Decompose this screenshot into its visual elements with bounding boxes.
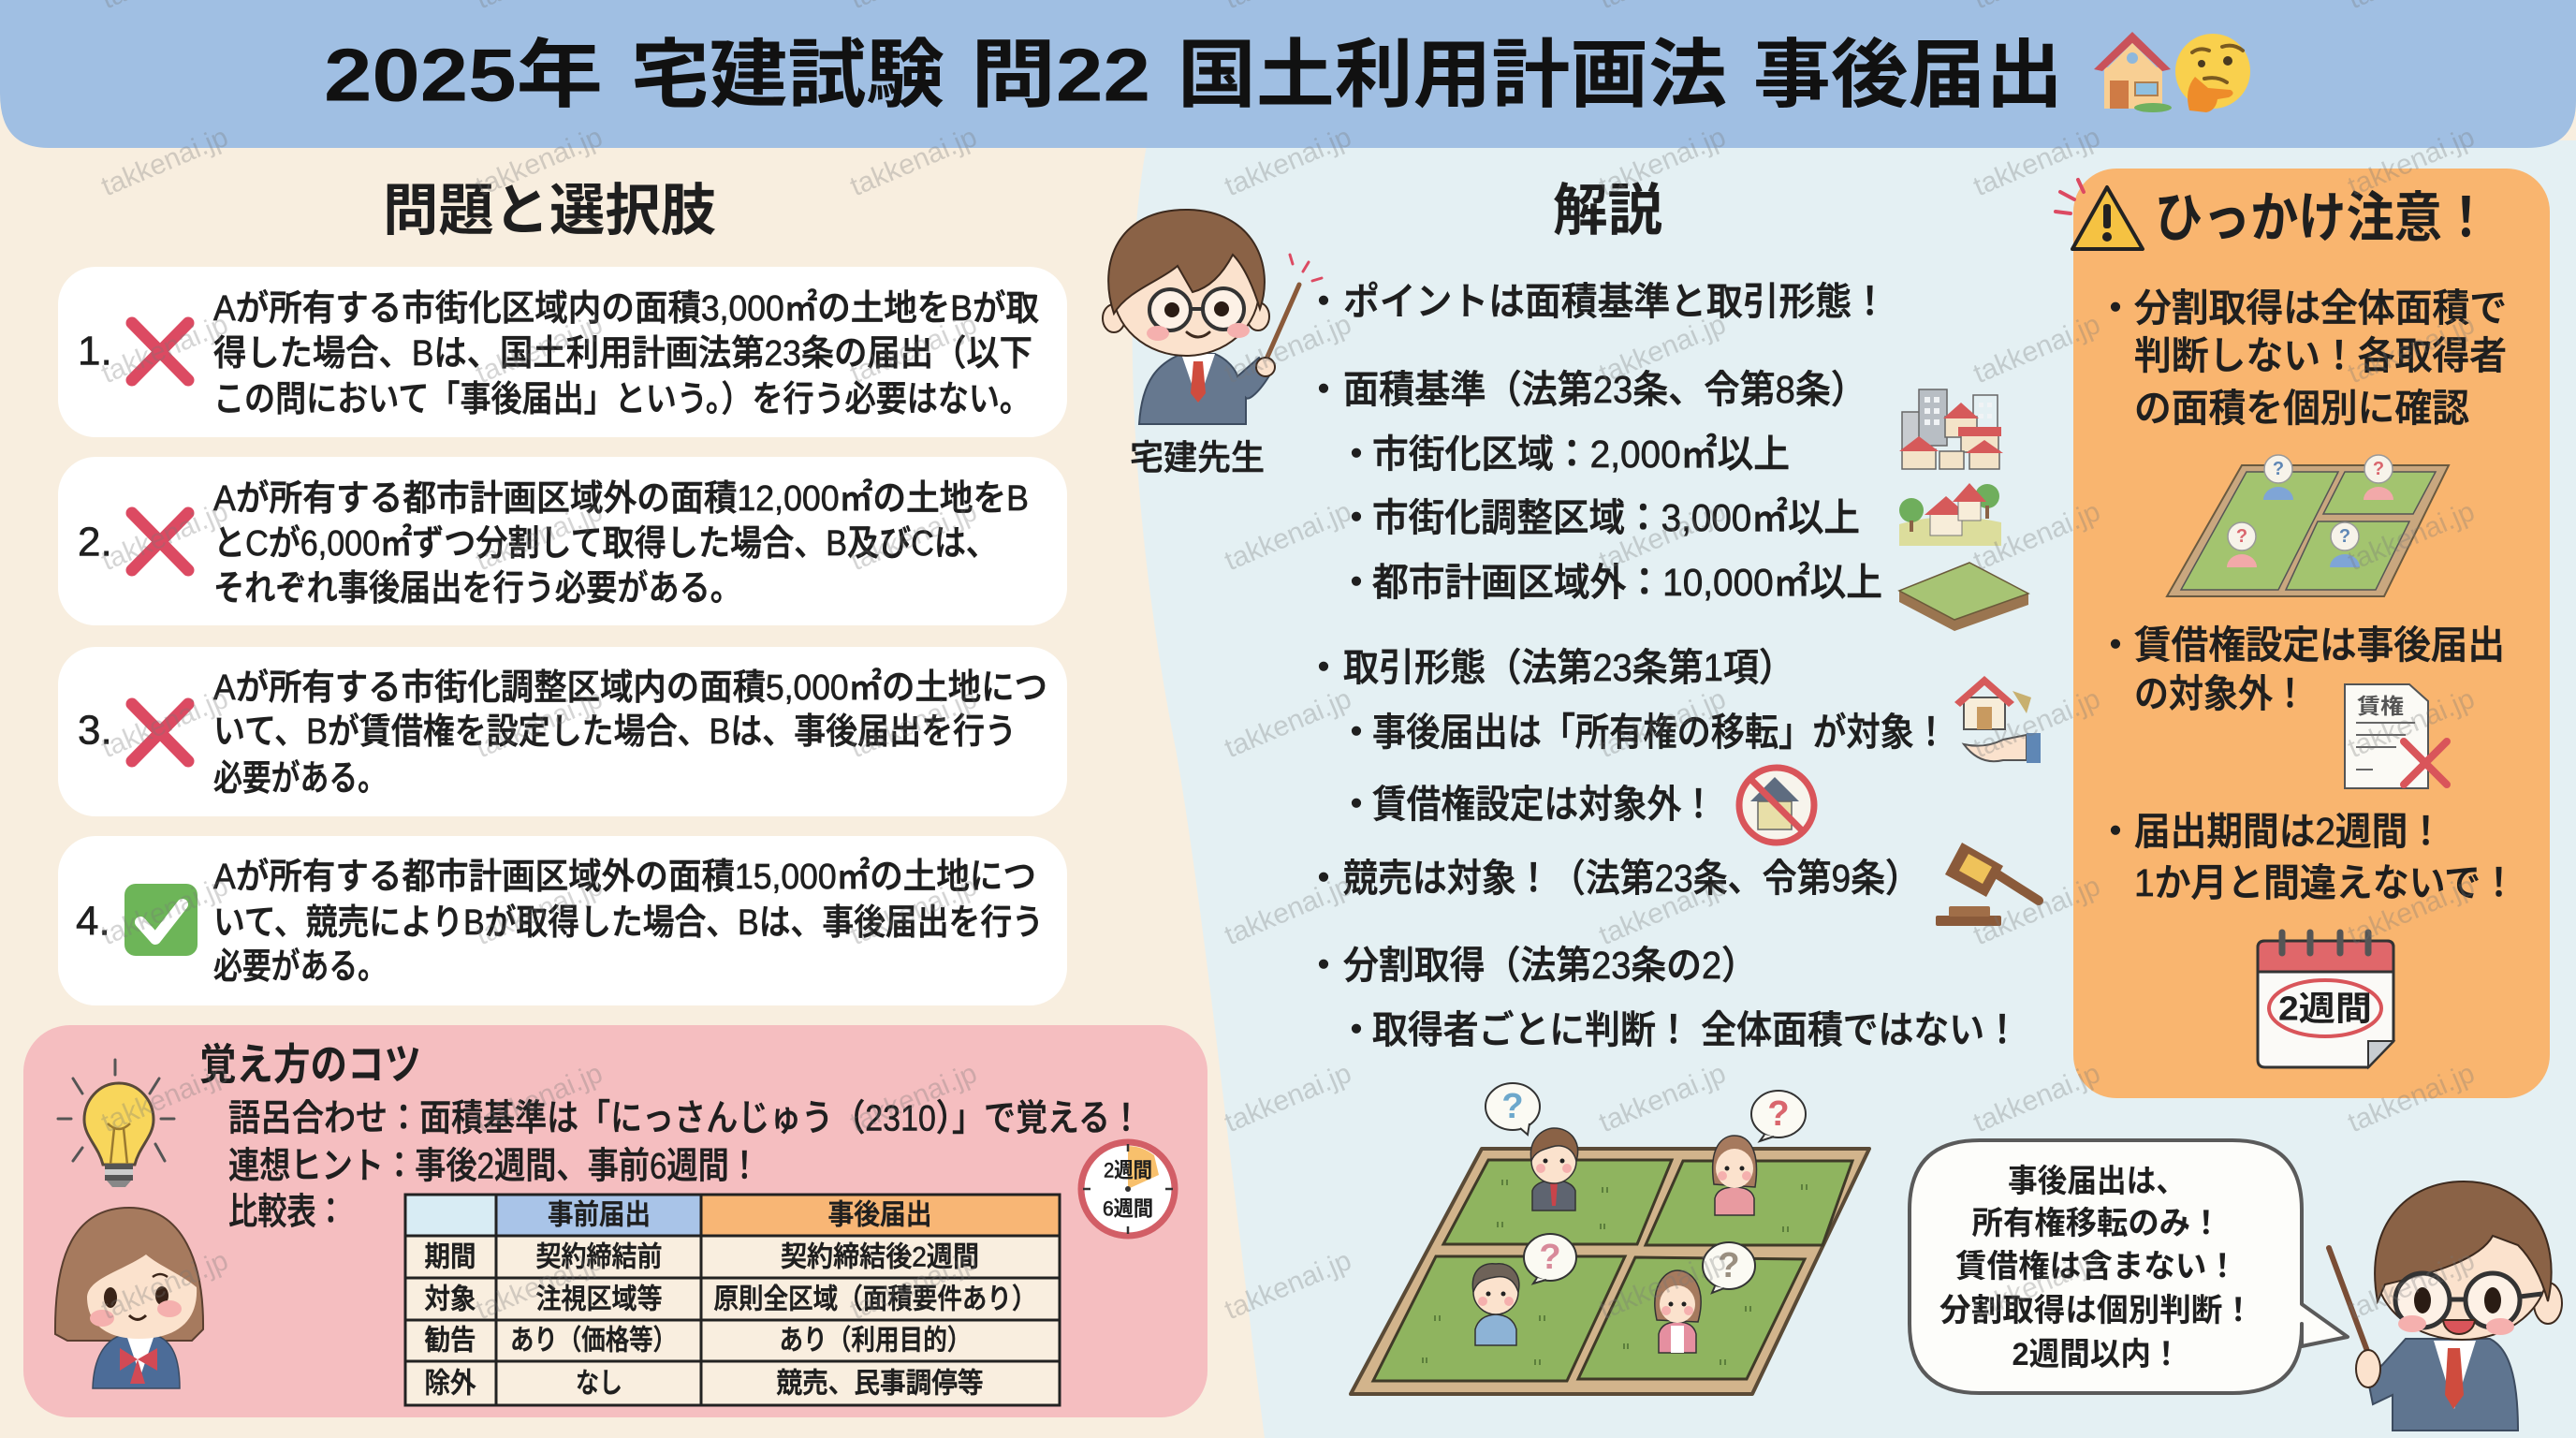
warning point 1: 分割取得は全体面積で [2134, 286, 2507, 330]
illustration: divided land mini: ? [2339, 526, 2350, 547]
explanation: transaction type: 賃借権設定は対象外！ [1372, 783, 1716, 826]
option card 1: この問において「事後届出」という。）を行う必要はない。 [213, 380, 1031, 419]
warning point 3: 届出期間は2週間！ [2134, 810, 2444, 853]
option card 2: 2. [78, 519, 112, 565]
watermarks: takkenai.jp [1969, 871, 2104, 951]
explanation: key point: ポイントは面積基準と取引形態！ [1343, 280, 1888, 323]
watermarks: takkenai.jp [2344, 683, 2479, 764]
option card 1 [58, 267, 1067, 437]
explanation: transaction type: 事後届出は「所有権の移転」が対象！ [1372, 711, 1948, 754]
explanation: divided acquisition [1305, 944, 2020, 1051]
comparison table: 期間 [425, 1241, 476, 1273]
icon: house [2094, 32, 2172, 112]
icon: check mark [124, 884, 198, 956]
explanation: key point: ・ [1305, 280, 1342, 323]
buyer 4 [1655, 1270, 1701, 1353]
watermarks: takkenai.jp [2344, 1058, 2479, 1138]
watermarks: takkenai.jp [472, 871, 607, 951]
mnemonic lines: 語呂合わせ：面積基準は「にっさんじゅう（2310）」で覚える！ [228, 1099, 1142, 1138]
warning point 2: ・ [2097, 624, 2134, 667]
watermarks: takkenai.jp [2344, 871, 2479, 951]
icon: clock 2 weeks / 6 weeks [1081, 1142, 1175, 1236]
comparison table: 競売、民事調停等 [777, 1369, 983, 1399]
illustration: divided land mini: ? [2373, 459, 2384, 479]
option card 2 [58, 457, 1067, 625]
comparison table: 対象 [425, 1284, 476, 1314]
question bubbles: ? [1501, 1087, 1524, 1126]
title: 事後届出 [1753, 34, 2063, 116]
icon: house on hand [1954, 676, 2041, 763]
explanation: transaction type: ・ [1337, 783, 1376, 826]
watermarks: takkenai.jp [97, 309, 232, 389]
watermarks: takkenai.jp [1221, 871, 1355, 951]
speech bubble: 分割取得は個別判断！ [1939, 1293, 2254, 1328]
watermarks: takkenai.jp [1969, 122, 2104, 202]
warning point 2 [2097, 624, 2505, 715]
explanation: auction: 競売は対象！（法第23条、令第9条） [1343, 857, 1920, 900]
watermarks: takkenai.jp [2344, 1245, 2479, 1326]
watermarks: takkenai.jp [1221, 122, 1355, 202]
heading: trap warning: ひっかけ注意！ [2155, 187, 2490, 249]
watermarks: takkenai.jp [1221, 1245, 1355, 1326]
mnemonic lines: 比較表： [228, 1193, 345, 1232]
explanation: area thresholds: ・ [1305, 368, 1342, 411]
comparison table [405, 1195, 1060, 1405]
icon: no lease house [1739, 768, 1814, 843]
explanation: transaction type: ・ [1305, 646, 1342, 689]
buyer 2 [1713, 1136, 1756, 1215]
icon: city buildings [1899, 389, 2003, 469]
icon: clock 2 weeks / 6 weeks: 6週間 [1103, 1196, 1153, 1221]
section heading: question and options: 問題と選択肢 [383, 180, 716, 242]
warning point 3 [2097, 810, 2517, 904]
watermarks: takkenai.jp [1969, 1058, 2104, 1138]
warning point 1: ・ [2097, 286, 2134, 330]
comparison table: あり（価格等） [510, 1326, 677, 1356]
option card 4: いて、競売によりBが取得した場合、Bは、事後届出を行う [213, 903, 1044, 943]
icon: cross mark [132, 513, 188, 570]
option card 3: 必要がある。 [213, 759, 387, 799]
heading: memory tips: 覚え方のコツ [199, 1040, 421, 1089]
title: 宅建試験 [631, 34, 944, 116]
option card 1: Aが所有する市街化区域内の面積3,000㎡の土地をBが取 [213, 289, 1039, 329]
explanation: transaction type: ・ [1337, 711, 1376, 754]
watermarks: takkenai.jp [1595, 871, 1730, 951]
watermarks: takkenai.jp [1595, 309, 1730, 389]
warning point 3: ・ [2097, 810, 2134, 853]
watermarks: takkenai.jp [846, 496, 981, 577]
option card 3 [58, 647, 1067, 816]
watermarks: takkenai.jp [1969, 496, 2104, 577]
explanation: divided acquisition: ・ [1337, 1008, 1376, 1051]
explanation: transaction type: 取引形態（法第23条第1項） [1343, 646, 1794, 689]
option card 4: 必要がある。 [213, 947, 387, 987]
section heading: explanation: 解説 [1553, 180, 1662, 242]
explanation: auction: ・ [1305, 857, 1342, 900]
watermarks: takkenai.jp [472, 1058, 607, 1138]
watermarks: takkenai.jp [1595, 496, 1730, 577]
explanation: transaction type [1305, 646, 1948, 826]
option card 2: Aが所有する都市計画区域外の面積12,000㎡の土地をB [213, 479, 1029, 519]
icon: green land tile [1899, 563, 2028, 631]
mnemonic lines [228, 1099, 1142, 1232]
explanation: area thresholds: 市街化区域：2,000㎡以上 [1372, 433, 1790, 476]
option card 1: 1. [78, 328, 112, 374]
option card 3: いて、Bが賃借権を設定した場合、Bは、事後届出を行う [213, 712, 1017, 752]
panel: trap warning [2056, 169, 2550, 1098]
option card 2: とCが6,000㎡ずつ分割して取得した場合、B及びCは、 [213, 524, 998, 564]
explanation: divided acquisition: 取得者ごとに判断！ 全体面積ではない！ [1372, 1008, 2020, 1051]
option card 1: 得した場合、Bは、国土利用計画法第23条の届出（以下 [213, 334, 1032, 374]
watermarks: takkenai.jp [472, 309, 607, 389]
watermarks: takkenai.jp [1221, 1058, 1355, 1138]
title: 問22 [971, 34, 1150, 116]
option card 2: それぞれ事後届出を行う必要がある。 [213, 569, 741, 609]
watermarks: takkenai.jp [1595, 1245, 1730, 1326]
speech bubble: 所有権移転のみ！ [1971, 1206, 2222, 1241]
watermarks: takkenai.jp [846, 122, 981, 202]
character: teacher top [1103, 210, 1322, 424]
panel: memory tips [23, 1025, 1208, 1417]
comparison table: 注視区域等 [535, 1284, 663, 1314]
option card 3: 3. [78, 708, 112, 753]
speech bubble: 2週間以内！ [2012, 1337, 2181, 1372]
icon: warning triangle [2056, 180, 2143, 249]
header band [0, 0, 2576, 148]
option card 4 [58, 836, 1067, 1005]
pointer [1265, 285, 1299, 363]
icon: cross mark [132, 704, 188, 761]
comparison table: 事前届出 [548, 1200, 651, 1230]
icon: lease document with cross: 賃権 [2357, 694, 2404, 718]
buyer 1 [1530, 1128, 1578, 1211]
watermarks: takkenai.jp [1969, 683, 2104, 764]
illustration: divided land mini [2167, 455, 2449, 596]
watermarks: takkenai.jp [846, 871, 981, 951]
icon: lease document with cross [2345, 684, 2447, 788]
buyer 3 [1472, 1264, 1519, 1345]
comparison table: 契約締結前 [535, 1241, 663, 1273]
comparison table: 事後届出 [827, 1200, 932, 1230]
warning point 1: の面積を個別に確認 [2134, 387, 2469, 430]
watermarks: takkenai.jp [1221, 683, 1355, 764]
watermarks: takkenai.jp [846, 1245, 981, 1326]
icon: calendar 2 weeks: 2週間 [2278, 989, 2372, 1028]
character: teacher bottom [2329, 1181, 2562, 1431]
warning point 1: 判断しない！各取得者 [2134, 334, 2507, 377]
speech bubble: 賃借権は含まない！ [1955, 1249, 2238, 1284]
illustration: divided land with four buyers [1351, 1083, 1869, 1394]
watermarks: takkenai.jp [1221, 309, 1355, 389]
watermarks: takkenai.jp [846, 309, 981, 389]
watermarks: takkenai.jp [846, 683, 981, 764]
watermarks: takkenai.jp [2344, 309, 2479, 389]
illustration: divided land mini: ? [2273, 459, 2284, 479]
character: student girl [55, 1208, 203, 1388]
watermarks: takkenai.jp [472, 683, 607, 764]
icon: cross mark [132, 323, 188, 380]
watermarks: takkenai.jp [97, 1058, 232, 1138]
watermarks: takkenai.jp [1595, 683, 1730, 764]
explanation: area thresholds: ・ [1337, 496, 1376, 539]
watermarks: takkenai.jp [1221, 496, 1355, 577]
explanation: area thresholds: 都市計画区域外：10,000㎡以上 [1372, 561, 1882, 604]
title: 国土利用計画法 [1178, 34, 1727, 116]
watermarks: takkenai.jp [472, 1245, 607, 1326]
mnemonic lines: 連想ヒント：事後2週間、事前6週間！ [228, 1146, 760, 1187]
question bubbles [1486, 1083, 1806, 1293]
warning point 3: 1か月と間違えないで！ [2134, 861, 2517, 904]
explanation: divided acquisition: 分割取得（法第23条の2） [1343, 944, 1757, 987]
option card 3: Aが所有する市街化調整区域内の面積5,000㎡の土地につ [213, 668, 1047, 708]
icon: gavel [1936, 843, 2039, 926]
icon: thinking face [2175, 34, 2250, 112]
question bubbles: ? [1767, 1094, 1790, 1134]
icon: light bulb [58, 1060, 174, 1187]
title: 2025年 [324, 34, 603, 116]
watermarks: takkenai.jp [97, 496, 232, 577]
watermarks: takkenai.jp [97, 871, 232, 951]
warning point 2: の対象外！ [2134, 672, 2307, 715]
comparison table: あり（利用目的） [779, 1326, 972, 1356]
question bubbles: ? [1718, 1246, 1740, 1285]
watermarks: takkenai.jp [1595, 1058, 1730, 1138]
watermarks: takkenai.jp [97, 1245, 232, 1326]
speech bubble [1910, 1140, 2348, 1393]
speech bubble: 事後届出は、 [2008, 1164, 2186, 1199]
warning point 2: 賃借権設定は事後届出 [2134, 624, 2505, 667]
explanation: divided acquisition: ・ [1305, 944, 1342, 987]
comparison table: 除外 [425, 1369, 476, 1399]
icon: clock 2 weeks / 6 weeks: 2週間 [1104, 1159, 1152, 1181]
watermarks: takkenai.jp [472, 122, 607, 202]
icon: suburban village [1899, 483, 2001, 546]
watermarks: takkenai.jp [2344, 122, 2479, 202]
icon: calendar 2 weeks [2258, 932, 2393, 1067]
explanation: area thresholds: 市街化調整区域：3,000㎡以上 [1372, 496, 1860, 539]
watermarks: takkenai.jp [1969, 309, 2104, 389]
comparison table: 原則全区域（面積要件あり） [713, 1284, 1037, 1314]
watermarks: takkenai.jp [1969, 1245, 2104, 1326]
watermarks: takkenai.jp [2344, 496, 2479, 577]
watermarks: takkenai.jp [97, 122, 232, 202]
comparison table: なし [576, 1369, 622, 1399]
explanation: area thresholds: ・ [1337, 561, 1376, 604]
explanation: area thresholds: 面積基準（法第23条、令第8条） [1343, 368, 1866, 411]
title [324, 34, 2063, 116]
teacher name label: 宅建先生 [1130, 438, 1265, 477]
watermarks: takkenai.jp [472, 496, 607, 577]
watermarks: takkenai.jp [1595, 122, 1730, 202]
explanation: area thresholds [1305, 368, 1882, 604]
comparison table: 契約締結後2週間 [781, 1241, 979, 1273]
watermarks: takkenai.jp [846, 1058, 981, 1138]
option card 4: Aが所有する都市計画区域外の面積15,000㎡の土地につ [213, 858, 1036, 897]
question bubbles: ? [1539, 1238, 1561, 1277]
explanation: area thresholds: ・ [1337, 433, 1376, 476]
illustration: divided land mini: ? [2236, 526, 2247, 547]
warning point 1 [2097, 286, 2507, 430]
option card 4: 4. [76, 899, 110, 944]
comparison table: 勧告 [425, 1326, 476, 1356]
watermarks: takkenai.jp [97, 683, 232, 764]
